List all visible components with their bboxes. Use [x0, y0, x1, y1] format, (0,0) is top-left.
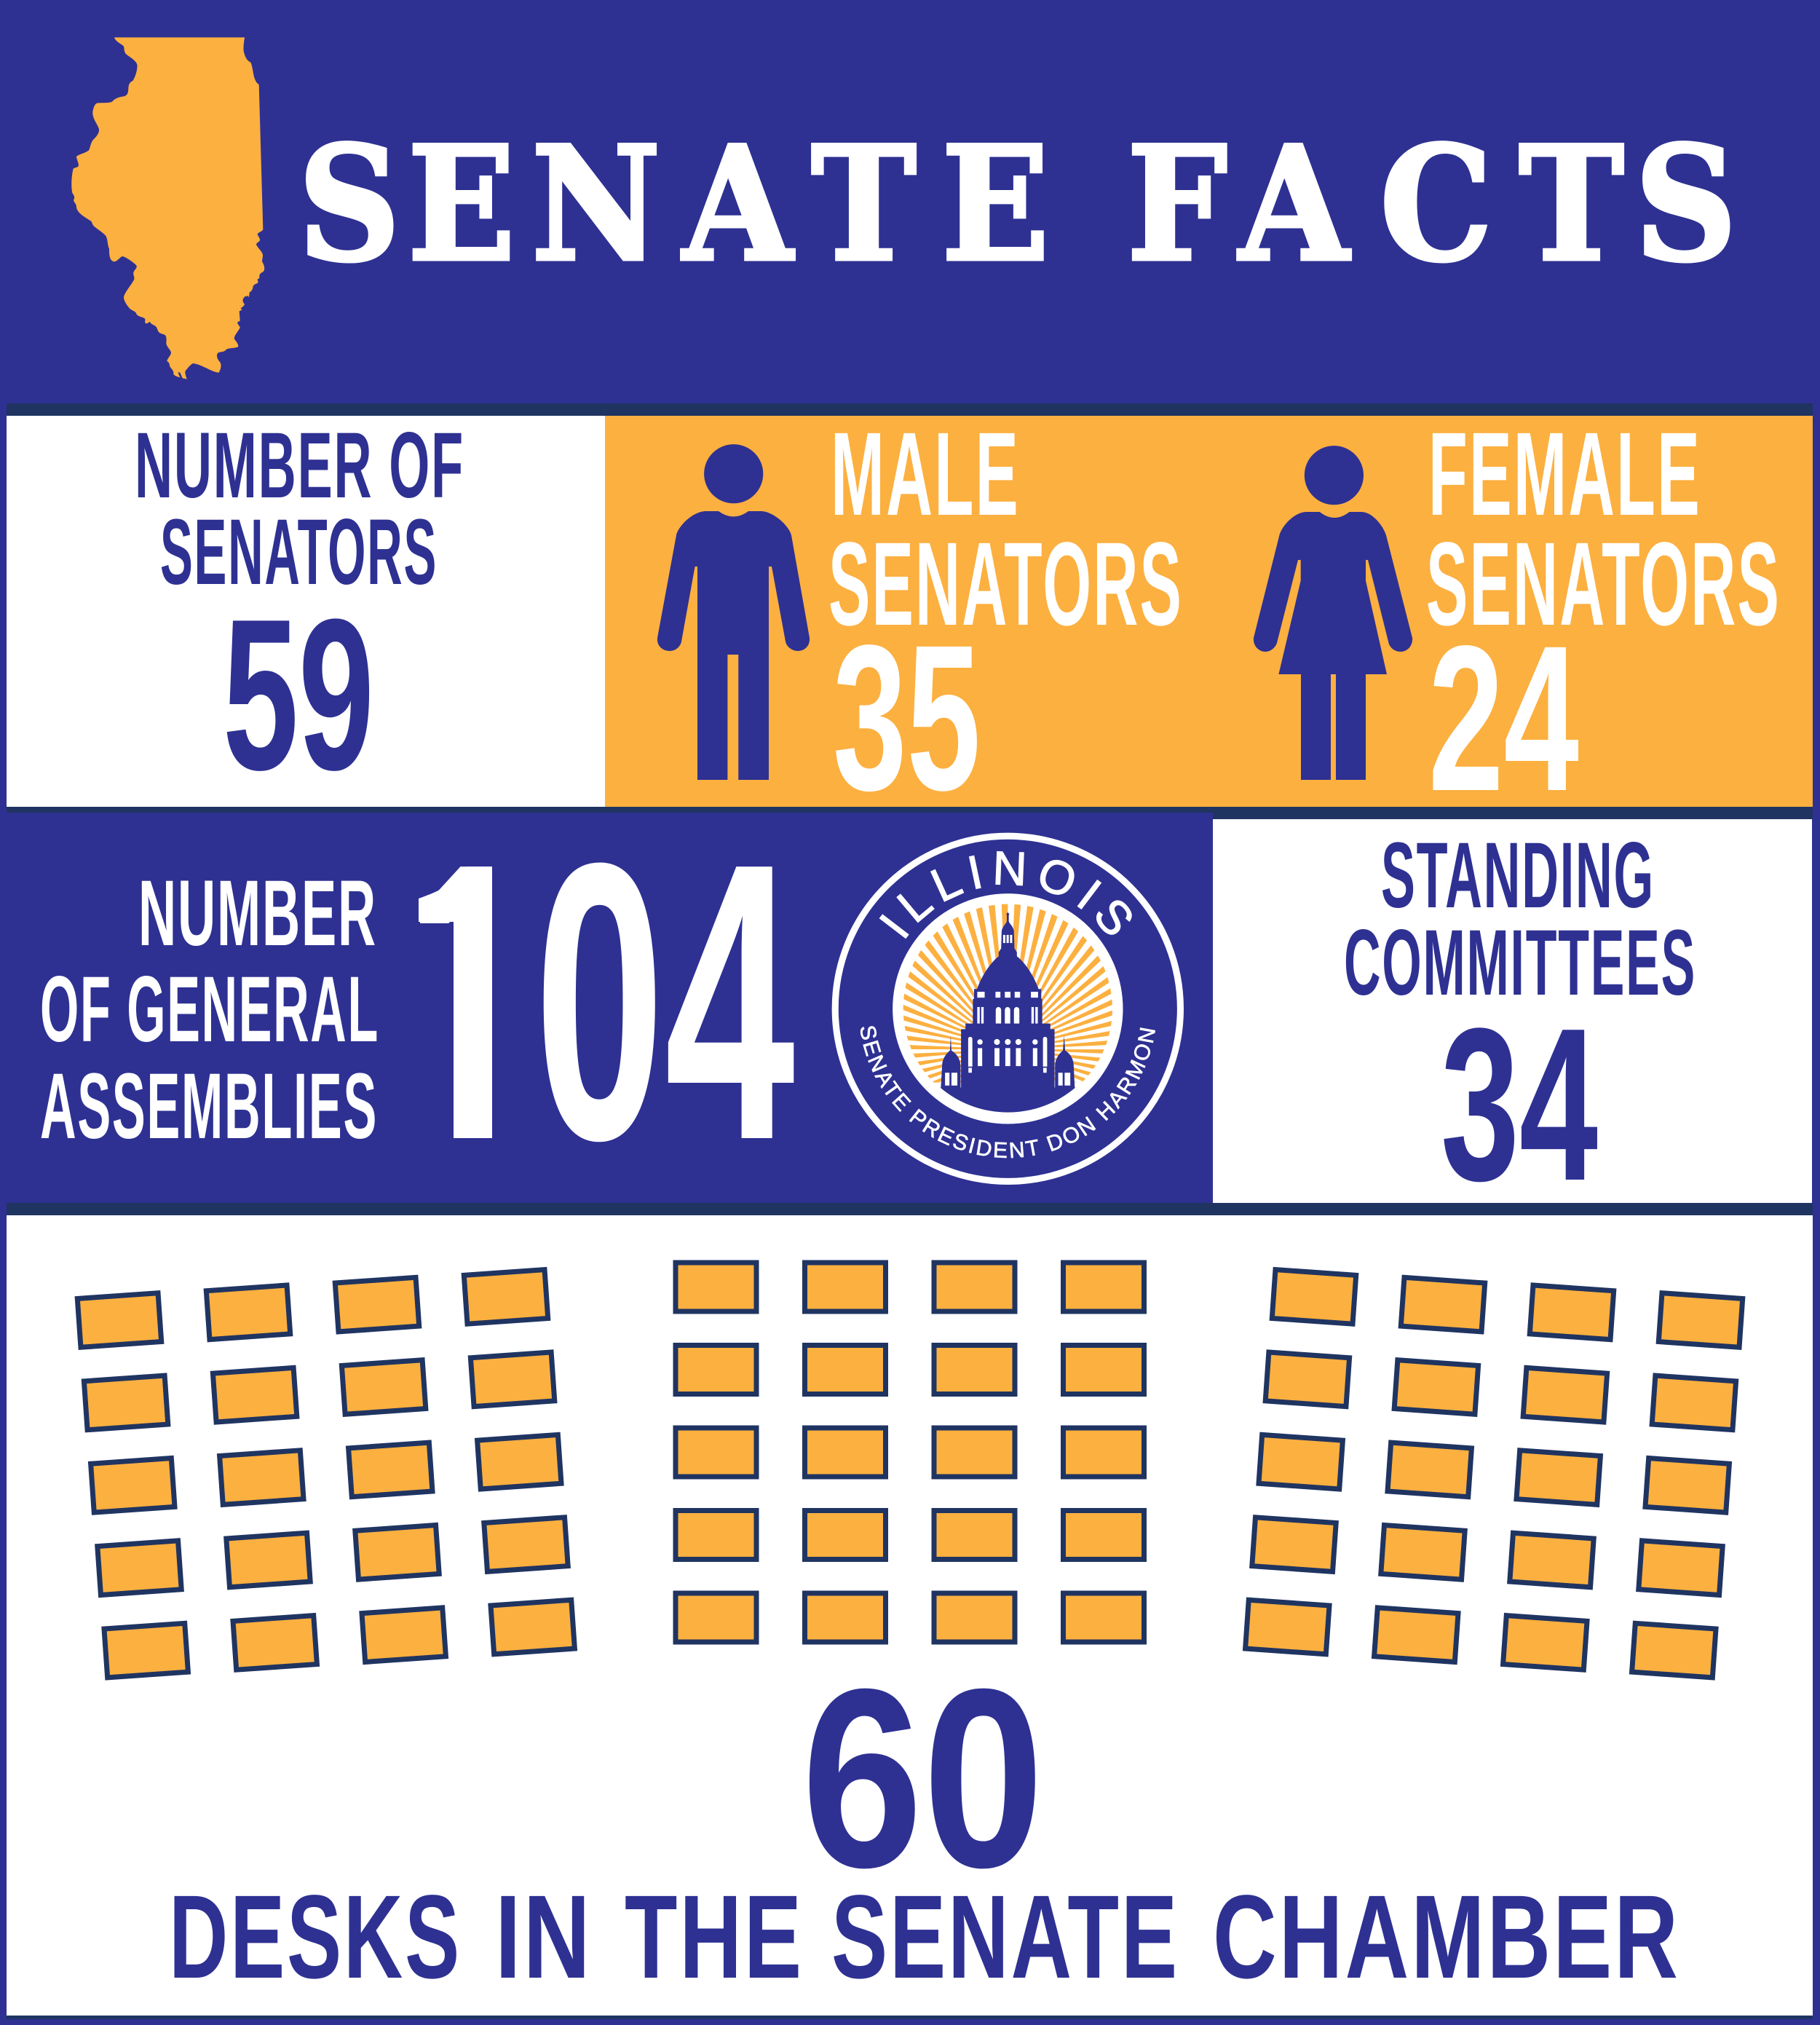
divider bar: top	[7, 403, 1813, 416]
number: 60: 60	[802, 1636, 1044, 1921]
panel: senate chamber desks	[7, 1215, 1813, 2016]
icon: male figure	[657, 444, 810, 780]
heading: senators: SENATORS	[160, 500, 438, 604]
number: 59: 59	[223, 574, 374, 815]
seal text: Senate President Don Harmon: SENATE PRESIDENT DON HARMON	[860, 1026, 1156, 1158]
icon: Illinois Senate seal	[831, 833, 1184, 1185]
heading: number: NUMBER	[138, 861, 377, 966]
panel: standing committees	[1213, 813, 1813, 1226]
divider bar: lower	[7, 1203, 1813, 1215]
panel: general assemblies	[40, 781, 1184, 1222]
capitol windows	[945, 935, 1070, 1086]
caption: desks in the senate chamber: THE	[625, 1870, 804, 2003]
heading: of general: OF GENERAL	[40, 958, 379, 1062]
icon: Illinois state map	[71, 37, 264, 379]
divider bar: bottom	[7, 2016, 1813, 2019]
caption: desks in the senate chamber: IN	[495, 1870, 593, 2003]
panel: number of senators	[7, 414, 605, 815]
panel: male and female senators	[605, 407, 1813, 834]
caption: desks in the senate chamber: DESKS	[169, 1870, 462, 2003]
caption: desks in the senate chamber	[169, 1870, 1680, 2003]
caption: desks in the senate chamber: SENATE	[831, 1870, 1179, 2003]
seal text: Illinois: ILLINOIS	[879, 850, 1132, 939]
number: 24: 24	[1428, 603, 1580, 834]
desks: left block	[77, 1270, 574, 1678]
number: 104	[404, 781, 796, 1222]
heading: male: MALE	[831, 407, 1020, 540]
number: 104: 104	[404, 781, 796, 1222]
heading: assemblies: ASSEMBLIES	[40, 1054, 378, 1158]
number: 34: 34	[1441, 983, 1599, 1226]
divider bar: middle left	[7, 807, 1813, 813]
heading: number of senators: NUMBER OF	[135, 414, 464, 518]
icon: female figure	[1254, 446, 1412, 780]
title: SENATE FACTS	[298, 112, 1737, 297]
desks: center block	[676, 1263, 1144, 1642]
heading: male senators: SENATORS	[828, 517, 1183, 650]
desks: right block	[1246, 1270, 1743, 1678]
number: 35: 35	[833, 602, 981, 834]
capitol silhouette	[940, 912, 1075, 1113]
